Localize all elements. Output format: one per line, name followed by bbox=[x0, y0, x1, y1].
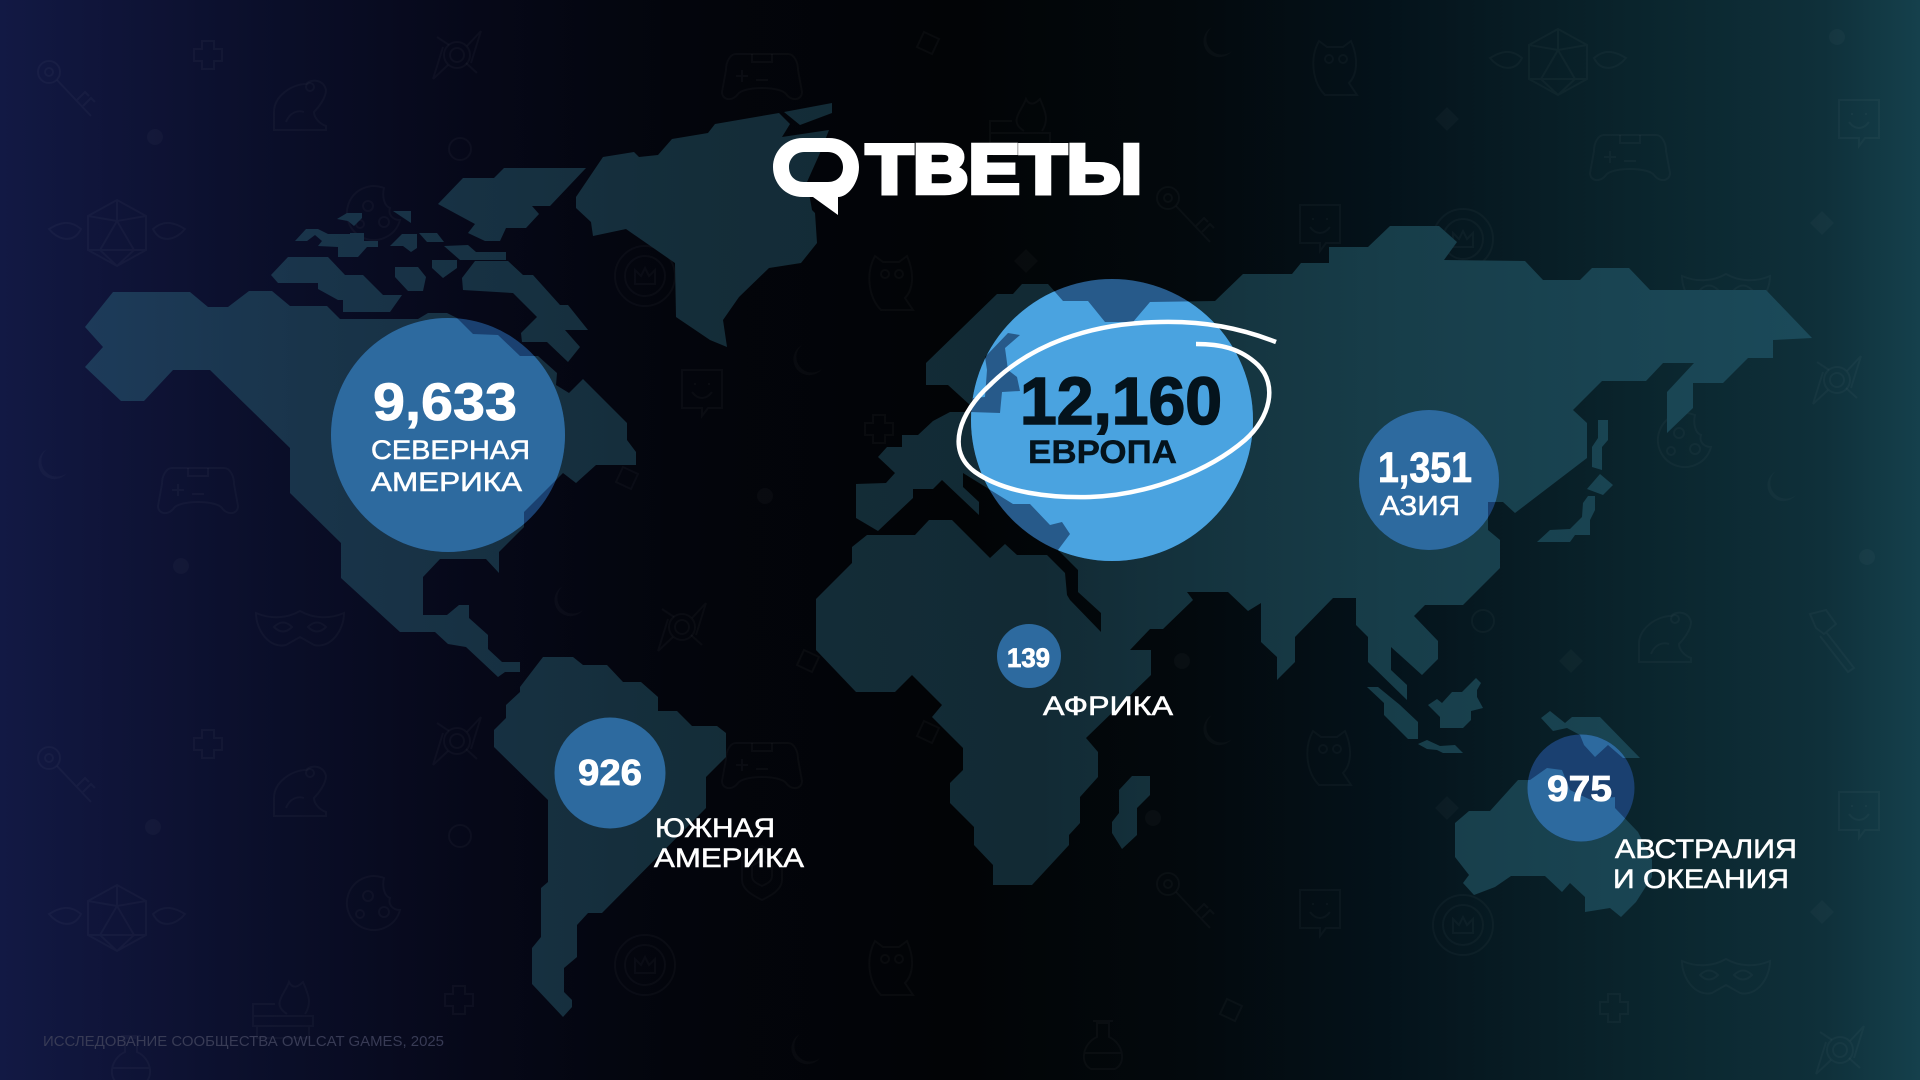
label: ЮЖНАЯ bbox=[655, 813, 775, 843]
bubble: Африка bbox=[997, 624, 1173, 721]
value: 139 bbox=[1007, 643, 1050, 673]
value: 926 bbox=[578, 752, 642, 793]
circle over land bbox=[1528, 734, 1634, 842]
hand-drawn highlight ellipse bbox=[959, 322, 1276, 497]
label: АЗИЯ bbox=[1380, 490, 1460, 521]
circle bbox=[554, 718, 666, 828]
bubble: Азия bbox=[1359, 410, 1499, 550]
label: И ОКЕАНИЯ bbox=[1613, 864, 1789, 894]
logo speech-bubble Q bbox=[773, 138, 859, 215]
bubble: Южная Америка bbox=[554, 718, 804, 873]
continent: North America mainland bbox=[85, 291, 636, 677]
Canadian Arctic islands bbox=[271, 168, 588, 362]
bubble: Европа (highlighted) bbox=[959, 279, 1276, 561]
label: АФРИКА bbox=[1043, 691, 1173, 721]
source footnote: ИССЛЕДОВАНИЕ СООБЩЕСТВА OWLCAT GAMES, 2025 bbox=[43, 1033, 444, 1050]
label: АМЕРИКА bbox=[371, 467, 522, 497]
value: 12,160 bbox=[1020, 364, 1222, 439]
circle bbox=[997, 624, 1061, 688]
Asian islands and Madagascar bbox=[1112, 420, 1613, 849]
logo word: ТВЕТЫ bbox=[866, 130, 1142, 208]
value: 975 bbox=[1547, 768, 1612, 809]
circle over sea bbox=[1528, 734, 1634, 842]
bubble: Австралия и Океания bbox=[1528, 734, 1797, 894]
circle over sea bbox=[1359, 410, 1499, 550]
circle over land bbox=[1359, 410, 1499, 550]
label: СЕВЕРНАЯ bbox=[371, 435, 530, 465]
world map bbox=[85, 103, 1812, 1017]
Greenland bbox=[576, 103, 832, 347]
South America bbox=[494, 657, 726, 1017]
bubble: Северная Америка bbox=[331, 318, 565, 552]
Australia and New Guinea bbox=[1455, 711, 1652, 917]
value: 1,351 bbox=[1378, 444, 1472, 492]
Eurasia and Africa bbox=[816, 226, 1812, 885]
circle over sea bbox=[331, 318, 565, 552]
logo: Ответы bbox=[773, 130, 1142, 215]
circle over land bbox=[971, 279, 1253, 561]
circle over land bbox=[331, 318, 565, 552]
value: 9,633 bbox=[373, 373, 517, 432]
label: АВСТРАЛИЯ bbox=[1615, 834, 1797, 864]
label: АМЕРИКА bbox=[654, 843, 804, 873]
circle over sea bbox=[971, 279, 1253, 561]
label: ЕВРОПА bbox=[1028, 434, 1177, 470]
